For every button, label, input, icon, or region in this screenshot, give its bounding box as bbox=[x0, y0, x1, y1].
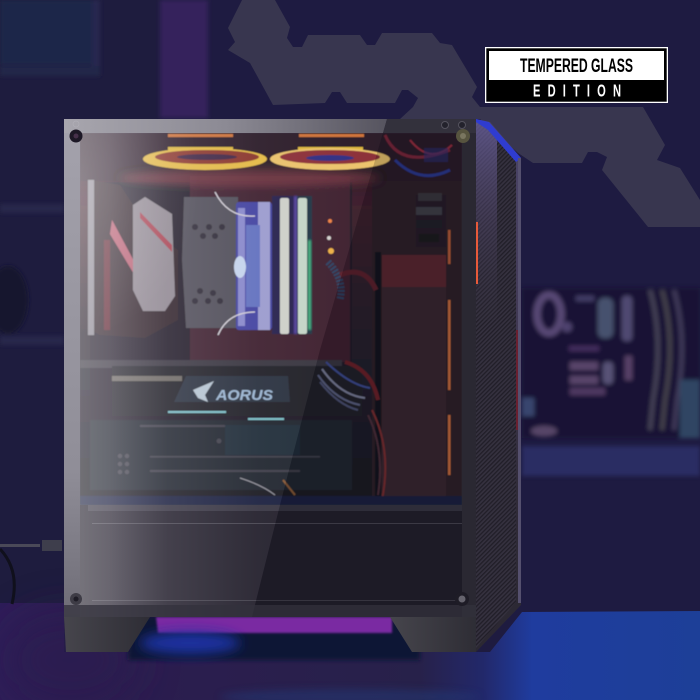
case side panel bbox=[476, 119, 521, 652]
RAM sticks bbox=[272, 196, 296, 334]
psu shroud and drive cage bbox=[372, 182, 462, 496]
case feet bbox=[64, 617, 476, 652]
badge: tempered glass edition bbox=[485, 47, 668, 103]
glass frame strips bbox=[64, 119, 476, 617]
graphics card: AORUS bbox=[215, 387, 273, 404]
under-case glow bbox=[128, 617, 420, 660]
mobo LEDs bbox=[328, 219, 332, 223]
motherboard bbox=[109, 182, 352, 328]
mobo lower details bbox=[118, 425, 320, 474]
bottom PSU shroud bbox=[80, 505, 462, 617]
graphics card bbox=[80, 360, 362, 420]
bundled cables bbox=[318, 362, 385, 500]
desk surface bbox=[0, 603, 700, 700]
VRM heatsink bbox=[133, 197, 175, 311]
fan rings bbox=[143, 134, 390, 170]
tempered glass reflection bbox=[64, 119, 476, 617]
PC case bbox=[64, 119, 521, 652]
background hexagon wall light bbox=[228, 0, 700, 227]
red glow below fans bbox=[120, 169, 380, 187]
rear IO cover bbox=[90, 180, 178, 338]
AORUS logo bbox=[193, 381, 214, 402]
case front frame bbox=[64, 119, 476, 617]
top radiator shroud bbox=[116, 133, 456, 180]
CPU cooler bbox=[182, 197, 238, 328]
24pin cable bbox=[328, 262, 341, 300]
badge: tempered glass edition: TEMPERED GLASS bbox=[520, 56, 633, 77]
badge: tempered glass edition: EDITION bbox=[533, 81, 628, 101]
cooler fan bbox=[236, 202, 272, 330]
background blurred PC on the right bbox=[522, 288, 700, 476]
power cable bbox=[0, 540, 62, 604]
thumb screws bbox=[70, 121, 470, 606]
case interior bbox=[80, 133, 462, 505]
